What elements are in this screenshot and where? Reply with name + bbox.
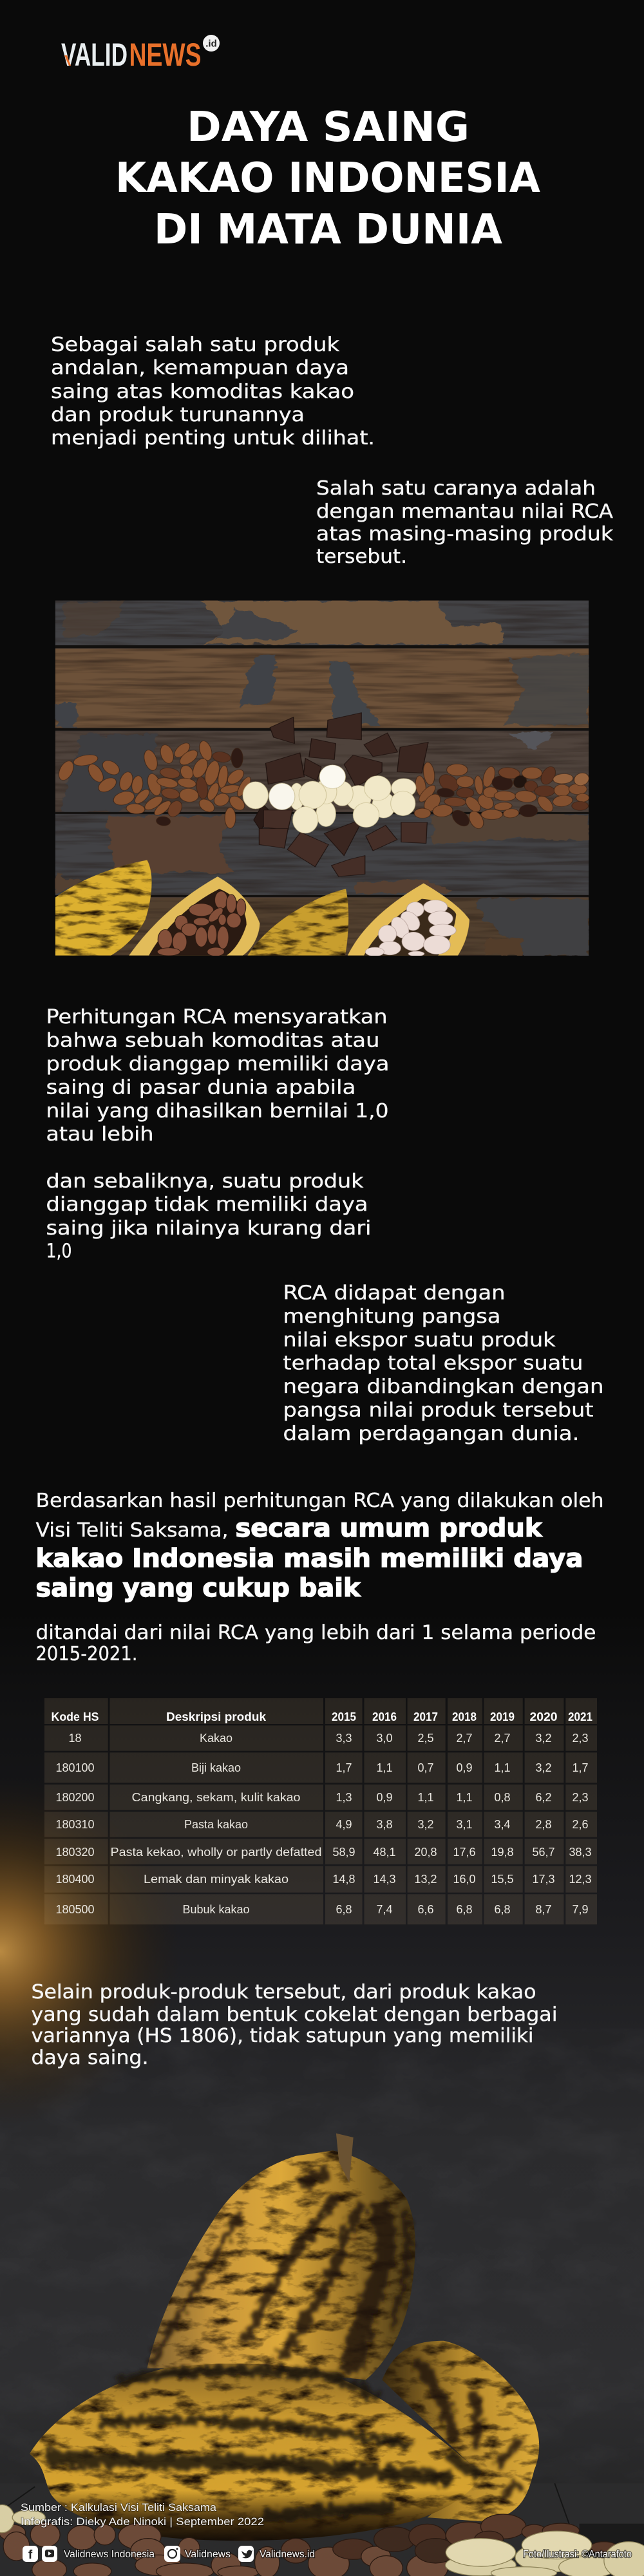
cocoa beans right — [414, 762, 591, 829]
text block: RCA definition: menghitung pangsa — [283, 1305, 501, 1328]
text block: RCA requirements: nilai yang dihasilkan bernilai 1,0 — [46, 1100, 389, 1122]
row: Cangkang, sekam, kulit kakao: 0,9 — [376, 1791, 393, 1804]
text block: key finding: Berdasarkan hasil perhitungan RCA yang dilakukan oleh — [36, 1490, 604, 1512]
row: Bubuk kakao: 6,8 — [494, 1903, 511, 1916]
icon: instagram — [164, 2546, 180, 2562]
row: Kakao: 2,7 — [494, 1732, 511, 1745]
row: Pasta kekao, wholly or partly defatted: 19,8 — [491, 1846, 514, 1859]
row: Pasta kakao: 3,2 — [417, 1818, 434, 1831]
text block: intro: Sebagai salah satu produk — [51, 334, 340, 356]
row: Biji kakao: 1,1 — [494, 1761, 511, 1774]
table header row — [52, 1710, 592, 1723]
table header row: 2016 — [372, 1710, 397, 1723]
row: Bubuk kakao: 6,6 — [417, 1903, 434, 1916]
row: Lemak dan minyak kakao: Lemak dan minyak kakao — [144, 1873, 289, 1886]
row: Pasta kakao: Pasta kakao — [184, 1818, 248, 1831]
text: twitter account: Validnews.id — [260, 2549, 315, 2560]
icon: twitter — [238, 2546, 254, 2562]
table header row: 2017 — [413, 1710, 438, 1723]
text block: RCA definition: terhadap total ekspor suatu — [283, 1352, 583, 1374]
text block: RCA monitoring: dengan memantau nilai RCA — [316, 500, 614, 523]
row: Bubuk kakao: 180500 — [55, 1903, 95, 1916]
text block: intro: andalan, kemampuan daya — [51, 357, 349, 379]
row: Bubuk kakao — [55, 1903, 589, 1916]
white chocolate discs — [0, 2505, 644, 2576]
row: Cangkang, sekam, kulit kakao: Cangkang, sekam, kulit kakao — [131, 1791, 300, 1804]
row: Biji kakao: 3,2 — [535, 1761, 552, 1774]
icon: facebook: f — [28, 2548, 33, 2562]
text block: RCA monitoring: tersebut. — [316, 545, 407, 568]
row: Pasta kekao, wholly or partly defatted: Pasta kekao, wholly or partly defatted — [111, 1846, 322, 1859]
text block: key finding: secara umum produk — [236, 1514, 543, 1543]
icon: back cocoa pod — [382, 2341, 539, 2522]
row: Lemak dan minyak kakao: 14,3 — [373, 1873, 396, 1886]
row: Biji kakao: 1,7 — [336, 1761, 352, 1774]
row: Cangkang, sekam, kulit kakao: 0,8 — [494, 1791, 511, 1804]
text: photo credit: Foto/Ilustrasi: ©Antarafoto — [523, 2549, 632, 2560]
row: Cangkang, sekam, kulit kakao: 6,2 — [535, 1791, 552, 1804]
row: Pasta kekao, wholly or partly defatted: 17,6 — [453, 1846, 476, 1859]
text block: RCA requirements: bahwa sebuah komoditas atau — [46, 1029, 380, 1052]
row: Kakao: Kakao — [200, 1732, 232, 1745]
row: Kakao: 2,7 — [456, 1732, 473, 1745]
row: Bubuk kakao: 7,9 — [572, 1903, 589, 1916]
row: Bubuk kakao: 6,8 — [456, 1903, 473, 1916]
row: Biji kakao: 0,9 — [456, 1761, 473, 1774]
row: Cangkang, sekam, kulit kakao — [55, 1791, 589, 1804]
row: Biji kakao — [55, 1761, 589, 1774]
row: Pasta kakao — [55, 1818, 589, 1831]
row: Biji kakao: Biji kakao — [191, 1761, 241, 1774]
icon: youtube — [42, 2546, 57, 2562]
row: Bubuk kakao: 6,8 — [336, 1903, 352, 1916]
credits: source and author: Infografis: Dieky Ade Ninoki | September 2022 — [21, 2515, 264, 2528]
photo: cocoa, chocolate and pods on wood — [55, 601, 591, 956]
text block: key finding: ditandai dari nilai RCA yang lebih dari 1 selama periode — [36, 1622, 596, 1644]
table header row: 2021 — [568, 1710, 592, 1723]
text block: key finding: Visi Teliti Saksama, — [36, 1519, 228, 1542]
row: Lemak dan minyak kakao: 15,5 — [491, 1873, 514, 1886]
row: Cangkang, sekam, kulit kakao: 180200 — [55, 1791, 95, 1804]
icon: whole yellow pod center — [247, 889, 348, 956]
cocoa beans left — [56, 740, 253, 828]
text block: RCA requirements: dan sebaliknya, suatu produk — [46, 1170, 364, 1193]
icon: open pod with brown beans — [129, 876, 260, 956]
logo — [61, 35, 220, 73]
text: instagram account: Validnews — [185, 2549, 231, 2560]
row: Pasta kakao: 3,4 — [494, 1818, 511, 1831]
title: KAKAO INDONESIA — [115, 155, 540, 202]
row: Pasta kekao, wholly or partly defatted: 20,8 — [414, 1846, 437, 1859]
row: Pasta kakao: 3,1 — [456, 1818, 473, 1831]
row: Cangkang, sekam, kulit kakao: 1,1 — [456, 1791, 473, 1804]
text block: RCA monitoring — [316, 477, 614, 568]
title — [115, 104, 540, 254]
row: Lemak dan minyak kakao: 16,0 — [453, 1873, 476, 1886]
row: Kakao: 3,0 — [376, 1732, 393, 1745]
icon: front cocoa pod — [30, 2363, 480, 2541]
row: Pasta kekao, wholly or partly defatted: 58,9 — [332, 1846, 355, 1859]
text block: RCA definition: pangsa nilai produk tersebut — [283, 1399, 594, 1422]
credits: source and author: Sumber : Kalkulasi Visi Teliti Saksama — [21, 2501, 217, 2514]
text block: RCA requirements: 1,0 — [46, 1240, 72, 1262]
text block: RCA definition: nilai ekspor suatu produk — [283, 1329, 556, 1351]
logo: NEWS — [129, 37, 201, 73]
row: Lemak dan minyak kakao: 14,8 — [332, 1873, 355, 1886]
text block: RCA definition: RCA didapat dengan — [283, 1282, 505, 1305]
row: Pasta kakao: 3,8 — [376, 1818, 393, 1831]
text block: RCA requirements: saing di pasar dunia apabila — [46, 1077, 355, 1099]
row: Bubuk kakao: Bubuk kakao — [182, 1903, 250, 1916]
row: Biji kakao: 180100 — [55, 1761, 95, 1774]
title: DI MATA DUNIA — [154, 206, 502, 254]
row: Bubuk kakao: 8,7 — [535, 1903, 552, 1916]
text block: RCA requirements: Perhitungan RCA mensyaratkan — [46, 1006, 388, 1028]
icon: facebook — [23, 2546, 38, 2562]
text block: RCA monitoring: Salah satu caranya adalah — [316, 477, 596, 500]
table header row: Deskripsi produk — [166, 1710, 267, 1723]
wood planks — [55, 601, 589, 956]
icon: whole yellow pod left — [55, 860, 152, 956]
row: Lemak dan minyak kakao: 13,2 — [414, 1873, 437, 1886]
text block: RCA requirements: dianggap tidak memiliki daya — [46, 1193, 368, 1216]
row: Lemak dan minyak kakao: 12,3 — [569, 1873, 592, 1886]
row: Pasta kakao: 180310 — [55, 1818, 95, 1831]
text block: RCA requirements: atau lebih — [46, 1123, 153, 1146]
logo: .id — [205, 39, 217, 49]
credits: source and author — [21, 2501, 264, 2528]
text block: intro: saing atas komoditas kakao — [51, 381, 354, 403]
text block: chocolate products note: daya saing. — [31, 2047, 148, 2069]
row: Kakao — [68, 1732, 589, 1745]
text block: key finding: kakao Indonesia masih memiliki daya — [36, 1544, 583, 1573]
text block: chocolate products note — [31, 1981, 558, 2069]
chocolate pieces — [254, 713, 428, 876]
table header row: 2019 — [490, 1710, 515, 1723]
text block: RCA requirements: produk dianggap memiliki daya — [46, 1053, 389, 1075]
text block: chocolate products note: variannya (HS 1806), tidak satupun yang memiliki — [31, 2025, 533, 2047]
cocoa beans pile — [0, 2514, 618, 2576]
table header row: 2018 — [452, 1710, 477, 1723]
row: Lemak dan minyak kakao — [55, 1873, 592, 1886]
text block: RCA requirements — [46, 1006, 389, 1262]
row: Kakao: 18 — [68, 1732, 82, 1745]
text block: intro: menjadi penting untuk dilihat. — [51, 427, 375, 450]
text block: intro: dan produk turunannya — [51, 404, 305, 426]
row: Kakao: 2,5 — [417, 1732, 434, 1745]
row: Pasta kakao: 4,9 — [336, 1818, 352, 1831]
plank gaps — [55, 645, 589, 897]
table header row: 2020 — [529, 1710, 558, 1723]
row: Pasta kekao, wholly or partly defatted: 38,3 — [569, 1846, 592, 1859]
text: facebook and youtube account: Validnews Indonesia — [64, 2549, 155, 2560]
row: Kakao: 3,2 — [535, 1732, 552, 1745]
icon: upright cocoa pod — [147, 2134, 415, 2380]
row: Lemak dan minyak kakao: 17,3 — [532, 1873, 555, 1886]
row: Bubuk kakao: 7,4 — [376, 1903, 393, 1916]
logo: VALID — [61, 37, 128, 73]
icon: open pod with white beans — [348, 883, 469, 956]
row: Pasta kekao, wholly or partly defatted: 48,1 — [373, 1846, 396, 1859]
text block: chocolate products note: yang sudah dalam bentuk cokelat dengan berbagai — [31, 2003, 558, 2026]
row: Kakao: 3,3 — [336, 1732, 352, 1745]
text block: RCA monitoring: atas masing-masing produk — [316, 523, 614, 545]
text block: RCA definition — [283, 1282, 604, 1445]
text block: RCA requirements: saing jika nilainya kurang dari — [46, 1217, 371, 1240]
table: RCA values per product 2015-2021 — [44, 1698, 597, 1924]
table cell backgrounds — [44, 1698, 597, 1924]
white chocolate discs — [243, 765, 416, 833]
background photo: cocoa pods on dark stone — [0, 1708, 644, 2576]
row: Cangkang, sekam, kulit kakao: 1,3 — [336, 1791, 352, 1804]
paint patches — [55, 601, 589, 956]
row: Biji kakao: 1,1 — [376, 1761, 393, 1774]
text block: intro — [51, 334, 375, 450]
text block: RCA definition: negara dibandingkan dengan — [283, 1376, 604, 1398]
row: Pasta kekao, wholly or partly defatted: 56,7 — [532, 1846, 555, 1859]
table header row: Kode HS — [52, 1710, 99, 1723]
text block: key finding: 2015-2021. — [36, 1643, 138, 1665]
row: Pasta kekao, wholly or partly defatted: 180320 — [55, 1846, 95, 1859]
social media footer — [23, 2546, 632, 2562]
text block: key finding: saing yang cukup baik — [36, 1574, 361, 1603]
row: Cangkang, sekam, kulit kakao: 2,3 — [572, 1791, 589, 1804]
table header row: 2015 — [332, 1710, 356, 1723]
row: Lemak dan minyak kakao: 180400 — [55, 1873, 95, 1886]
row: Kakao: 2,3 — [572, 1732, 589, 1745]
text block: RCA definition: dalam perdagangan dunia. — [283, 1423, 580, 1445]
row: Pasta kakao: 2,8 — [535, 1818, 552, 1831]
text block: key finding — [36, 1490, 604, 1665]
row: Cangkang, sekam, kulit kakao: 1,1 — [417, 1791, 434, 1804]
row: Pasta kakao: 2,6 — [572, 1818, 589, 1831]
row: Pasta kekao, wholly or partly defatted — [55, 1846, 592, 1859]
title: DAYA SAING — [187, 104, 469, 151]
row: Biji kakao: 1,7 — [572, 1761, 589, 1774]
row: Biji kakao: 0,7 — [417, 1761, 434, 1774]
text block: chocolate products note: Selain produk-produk tersebut, dari produk kakao — [31, 1981, 536, 2003]
